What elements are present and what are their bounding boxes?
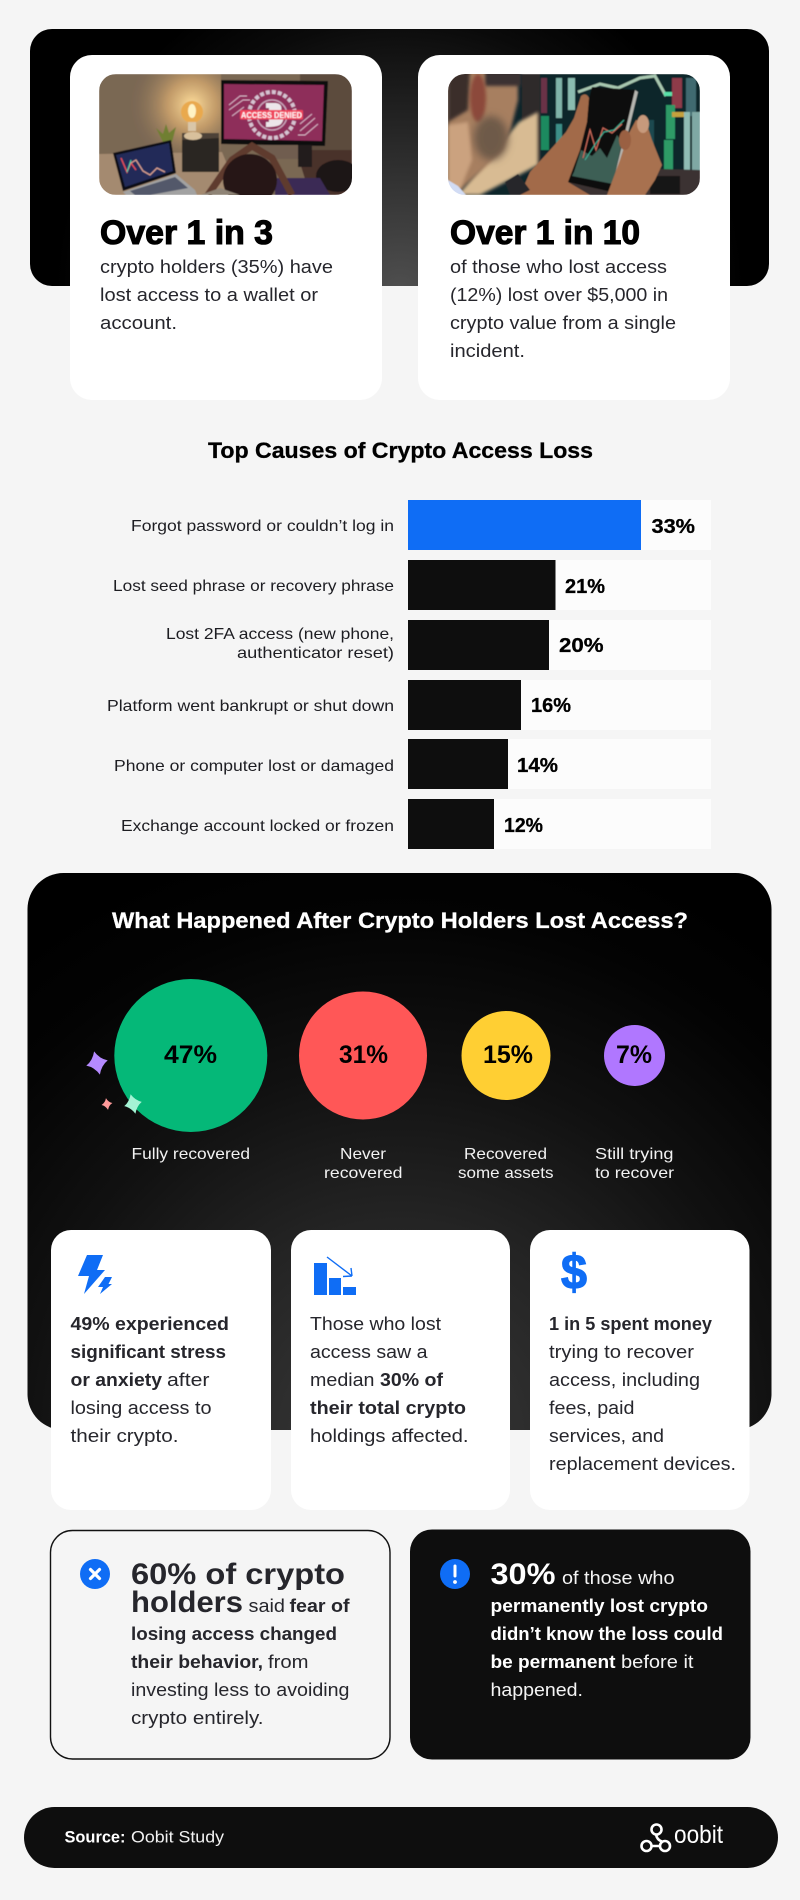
source: Oobit Study — [131, 1828, 225, 1846]
body text — [450, 256, 676, 361]
logo: oobit: oobit — [674, 1821, 723, 1849]
text: holdings affected. — [310, 1425, 468, 1446]
text: access, including — [549, 1369, 700, 1390]
text: trying to recover — [549, 1341, 694, 1362]
row: forgot password: 33% — [652, 516, 695, 538]
bubble: never recovered: recovered — [324, 1165, 402, 1182]
bubble: fully recovered — [114, 979, 267, 1163]
body text: (12%) lost over $5,000 in — [450, 284, 668, 305]
text: fees, paid — [549, 1397, 634, 1418]
row: lost 2FA: Lost 2FA access (new phone, — [166, 626, 394, 643]
footer bar — [24, 1807, 778, 1868]
bubble: recovered some — [458, 1011, 554, 1182]
icon: dollar sign: $ — [561, 1246, 587, 1300]
icon: sparkles — [83, 1049, 144, 1116]
bubble: recovered some: 15% — [483, 1041, 533, 1069]
text: losing access changed — [131, 1623, 337, 1644]
body text: of those who lost access — [450, 256, 667, 277]
row: phone lost — [114, 739, 711, 789]
text: Those who lost — [310, 1313, 441, 1334]
body text: incident. — [450, 340, 525, 361]
text: 1 in 5 spent money — [549, 1313, 713, 1334]
text: 60% of crypto — [131, 1558, 345, 1591]
text — [549, 1313, 736, 1474]
text: 30% of — [380, 1369, 444, 1390]
text: median — [310, 1369, 374, 1390]
text: losing access to — [70, 1397, 212, 1418]
bubble: still trying — [595, 1025, 675, 1182]
body text: account. — [100, 312, 177, 333]
row: lost seed phrase: 21% — [565, 576, 605, 598]
photo: hands holding phone with chart — [448, 70, 700, 195]
row: lost 2FA: authenticator reset) — [237, 645, 394, 662]
row: exchange locked — [121, 799, 711, 849]
text: investing less to avoiding — [131, 1679, 350, 1700]
icon: lightning bolts — [78, 1255, 112, 1294]
text: said — [248, 1595, 285, 1616]
card: recovery spending — [530, 1230, 750, 1510]
row: lost 2FA: 20% — [559, 635, 604, 657]
row: exchange locked: Exchange account locked or frozen — [121, 818, 394, 835]
heading: top causes: Top Causes of Crypto Access Loss — [208, 438, 593, 463]
text — [490, 1558, 723, 1700]
row: lost seed phrase — [113, 560, 711, 610]
text: be permanent — [490, 1651, 616, 1672]
photo: access denied desk scene — [99, 74, 352, 195]
icon: falling bar chart — [314, 1257, 356, 1295]
logo: oobit — [642, 1821, 723, 1851]
heading: what happened: What Happened After Crypto Holders Lost Access? — [112, 908, 688, 933]
text: access saw a — [310, 1341, 428, 1362]
icon: x circle — [80, 1559, 110, 1589]
row: lost 2FA — [166, 620, 711, 670]
bubble: still trying: 7% — [616, 1041, 652, 1069]
text: fear of — [290, 1595, 350, 1616]
body text: crypto holders (35%) have — [100, 256, 333, 277]
row: platform bankrupt — [107, 680, 711, 730]
panel: over 1 in 3 card — [70, 55, 382, 400]
text: 49% experienced — [70, 1313, 229, 1334]
callout: 30 percent — [410, 1530, 750, 1760]
bubble: fully recovered: Fully recovered — [132, 1146, 250, 1163]
row: exchange locked: 12% — [504, 815, 543, 837]
bubble: never recovered — [299, 992, 427, 1182]
text: of those who — [562, 1567, 674, 1588]
heading: over 1 in 10: Over 1 in 10 — [450, 214, 640, 252]
text: 30% — [490, 1558, 556, 1591]
bubble: recovered some: Recovered — [464, 1146, 547, 1163]
heading: over 1 in 3: Over 1 in 3 — [100, 214, 273, 252]
card: stress — [51, 1230, 271, 1510]
row: lost seed phrase: Lost seed phrase or recovery phrase — [113, 578, 394, 595]
panel: what happened dark background — [28, 873, 772, 1430]
text: holders — [131, 1586, 243, 1619]
text: or anxiety — [70, 1369, 163, 1390]
panel: over 1 in 10 card — [418, 55, 730, 400]
body text — [100, 256, 333, 333]
bubble chart: outcomes — [114, 979, 675, 1182]
text — [310, 1313, 468, 1446]
text: replacement devices. — [549, 1453, 736, 1474]
source: Source: — [64, 1828, 126, 1846]
row: forgot password — [131, 500, 711, 550]
text: after — [167, 1369, 210, 1390]
bubble: never recovered: Never — [340, 1146, 387, 1163]
text: from — [268, 1651, 308, 1672]
body text: lost access to a wallet or — [100, 284, 318, 305]
card: holdings — [291, 1230, 510, 1510]
text: permanently lost crypto — [490, 1595, 708, 1616]
bubble: still trying: Still trying — [595, 1146, 674, 1163]
bubble: recovered some: some assets — [458, 1165, 554, 1182]
text — [131, 1558, 350, 1728]
body text: crypto value from a single — [450, 312, 676, 333]
photo: access denied desk scene: ACCESS DENIED — [241, 110, 302, 120]
callout: 60 percent — [50, 1530, 390, 1759]
row: forgot password: Forgot password or couldn’t log in — [131, 518, 394, 535]
text: crypto entirely. — [131, 1707, 264, 1728]
text: happened. — [490, 1679, 583, 1700]
text: didn’t know the loss could — [490, 1623, 723, 1644]
text: significant stress — [70, 1341, 226, 1362]
text: their behavior, — [131, 1651, 263, 1672]
row: phone lost: Phone or computer lost or damaged — [114, 758, 394, 775]
bubble: never recovered: 31% — [339, 1041, 388, 1069]
text: before it — [621, 1651, 694, 1672]
row: phone lost: 14% — [517, 755, 558, 777]
icon: exclamation circle — [440, 1559, 470, 1589]
bar chart: top causes — [107, 500, 711, 849]
row: platform bankrupt: 16% — [531, 695, 571, 717]
text: their crypto. — [70, 1425, 178, 1446]
source — [64, 1828, 225, 1846]
hero dark panel — [30, 29, 769, 286]
row: platform bankrupt: Platform went bankrupt or shut down — [107, 698, 394, 715]
text — [70, 1313, 229, 1446]
bubble: fully recovered: 47% — [164, 1041, 217, 1069]
text: services, and — [549, 1425, 664, 1446]
text: their total crypto — [310, 1397, 466, 1418]
bubble: still trying: to recover — [595, 1165, 675, 1182]
